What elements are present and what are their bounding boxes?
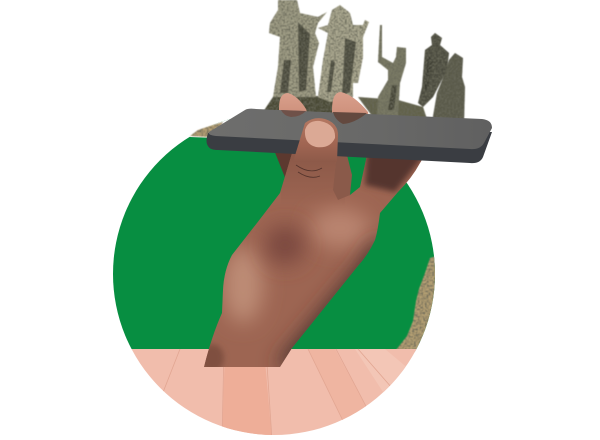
statue figure 2 (318, 5, 369, 102)
green wall (113, 118, 435, 349)
right plank (308, 349, 366, 420)
thumb creases (296, 165, 322, 177)
finger shadow (362, 158, 422, 194)
hand (204, 153, 422, 367)
statue figure 5 (432, 53, 465, 124)
statue base left (263, 96, 353, 118)
lower hand tone (204, 342, 226, 367)
thumb base (281, 154, 336, 189)
wrist shadow (270, 232, 377, 367)
white cut-out top of circle (190, 119, 230, 138)
palm and wrist (204, 154, 422, 367)
middle finger behind phone (322, 155, 352, 207)
fingertip left (279, 93, 310, 122)
statue figure 3: swordsman (377, 25, 406, 116)
statue base right (358, 97, 428, 122)
thumb tip over phone (293, 118, 338, 177)
thumbnail (305, 121, 335, 147)
darker plank (222, 367, 272, 435)
knuckle shadow (265, 225, 305, 265)
phone side (206, 132, 492, 163)
torn paper edge right (396, 256, 435, 352)
statue figure 4 (418, 33, 449, 107)
phone face (209, 109, 492, 149)
fingertip right (332, 92, 370, 124)
index finger behind phone (274, 150, 296, 180)
statues (263, 0, 465, 124)
light palm patch (223, 247, 263, 323)
reflection left (281, 110, 306, 117)
background circle (113, 118, 435, 435)
phone (206, 109, 492, 163)
torn paper top left (190, 122, 223, 137)
plank seams (160, 349, 392, 440)
far right plank (356, 349, 406, 392)
statue figure 1 (269, 0, 327, 97)
palm highlight (310, 208, 370, 248)
reflection right (333, 112, 367, 124)
illustration: hand holding phone with statues (113, 0, 492, 435)
statue folds (280, 22, 433, 110)
wood floor (132, 348, 416, 435)
